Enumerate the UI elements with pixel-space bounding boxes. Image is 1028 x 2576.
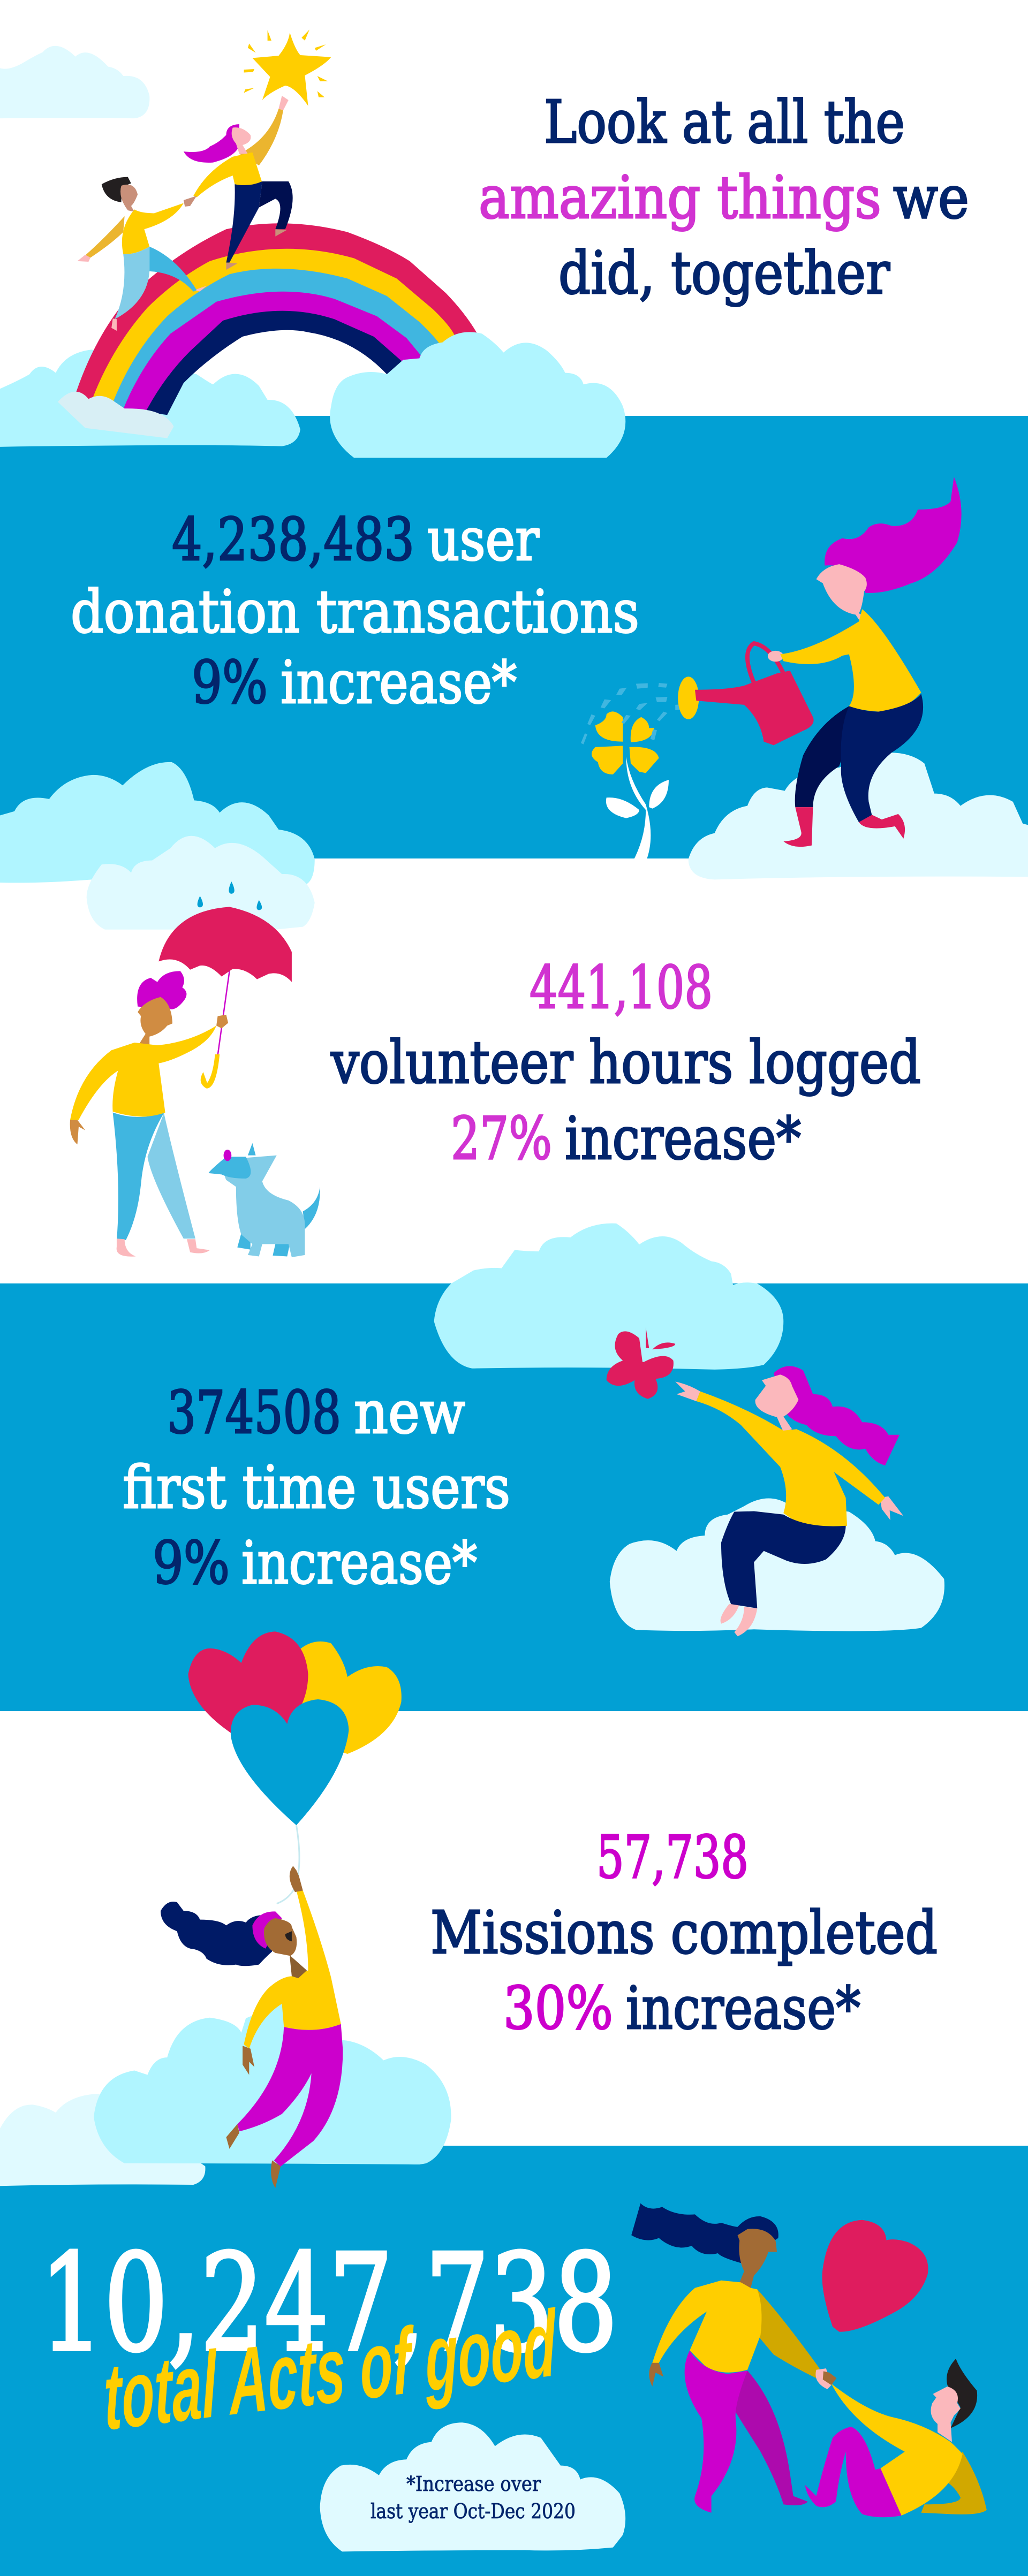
heading xyxy=(479,88,969,307)
stat: volunteer hours: 441,108 xyxy=(530,953,713,1022)
cloud: left xyxy=(0,762,315,885)
stat: donation transactions: 9% xyxy=(192,648,268,717)
cloud: behind rainbow xyxy=(0,349,300,447)
icon: umbrella xyxy=(158,907,292,1089)
icon: heart balloons xyxy=(188,1631,402,1904)
stat: first time users: first time users xyxy=(123,1453,510,1522)
cloud: under gardener xyxy=(689,753,1028,879)
panel: watering illustration xyxy=(0,477,1028,885)
stat: volunteer hours xyxy=(330,953,921,1173)
cloud: upper xyxy=(434,1224,783,1370)
rainbow xyxy=(73,223,477,415)
cloud: footnote xyxy=(320,2422,625,2551)
icon: butterfly xyxy=(607,1327,675,1399)
cloud: right of rainbow xyxy=(330,332,625,458)
heading: Look at all the xyxy=(544,88,905,156)
icon: star xyxy=(244,29,331,106)
cloud: top left xyxy=(0,46,149,118)
heading: did, together xyxy=(558,239,890,307)
stat: first time users: 374508 xyxy=(167,1378,341,1447)
icon: raindrops xyxy=(198,882,262,910)
stat: first time users: increase* xyxy=(241,1529,477,1597)
panel: balloon illustration xyxy=(0,1866,451,2188)
icon: watering can xyxy=(678,643,814,745)
stat: volunteer hours: increase* xyxy=(565,1104,801,1173)
figure: woman sitting on cloud xyxy=(675,1366,903,1636)
panel: butterfly illustration xyxy=(188,1224,944,1904)
stat: total number: 10,247,738 xyxy=(40,2225,618,2381)
panel: closing illustration xyxy=(320,2203,987,2551)
stat: missions completed xyxy=(430,1823,938,2042)
panel: first time users background xyxy=(0,1283,1028,1711)
stat: first time users: new xyxy=(354,1378,465,1447)
stat: missions completed: increase* xyxy=(626,1974,860,2042)
stat: missions completed: Missions completed xyxy=(430,1898,938,1967)
stat: donation transactions xyxy=(71,505,639,717)
script caption: total Acts of good xyxy=(102,2290,558,2450)
icon: water drops xyxy=(581,683,685,744)
stat: first time users xyxy=(123,1378,510,1597)
footnote: *Increase over xyxy=(406,2472,541,2496)
heading: amazing things xyxy=(479,163,881,232)
icon: flower xyxy=(592,711,669,862)
panel: hero illustration xyxy=(0,29,625,458)
cloud: behind umbrella xyxy=(87,836,315,930)
stat: volunteer hours: volunteer hours logged xyxy=(330,1028,921,1097)
stat: volunteer hours: 27% xyxy=(451,1104,552,1173)
cloud: pale left xyxy=(0,2094,205,2186)
cloud: lower seat xyxy=(610,1499,944,1631)
footnote: last year Oct-Dec 2020 xyxy=(371,2499,576,2523)
panel: donation transactions background xyxy=(0,416,1028,858)
stat: donation transactions: 4,238,483 xyxy=(172,505,414,574)
figure: person with umbrella xyxy=(70,971,228,1257)
cloud: main xyxy=(94,2004,451,2164)
icon: heart xyxy=(822,2220,928,2332)
stat: donation transactions: increase* xyxy=(281,648,517,717)
figure: gardener xyxy=(768,477,962,847)
heading: we xyxy=(893,163,969,232)
figure: standing woman xyxy=(631,2203,820,2513)
figure: person floating xyxy=(161,1866,343,2188)
panel: umbrella illustration xyxy=(70,836,320,1257)
stat: donation transactions: user xyxy=(427,505,539,574)
figure: girl reaching for star xyxy=(184,96,293,270)
figure: boy holding hand xyxy=(77,177,207,331)
figure: sitting boy xyxy=(805,2359,987,2517)
stat: first time users: 9% xyxy=(153,1529,230,1597)
figure: dog xyxy=(208,1143,320,1257)
stat: missions completed: 30% xyxy=(503,1974,613,2042)
footnote xyxy=(371,2472,576,2523)
cloud: small at rainbow base xyxy=(58,392,173,438)
stat: donation transactions: donation transactions xyxy=(71,577,639,646)
stat: missions completed: 57,738 xyxy=(596,1823,749,1891)
panel: total acts background xyxy=(0,2146,1028,2576)
